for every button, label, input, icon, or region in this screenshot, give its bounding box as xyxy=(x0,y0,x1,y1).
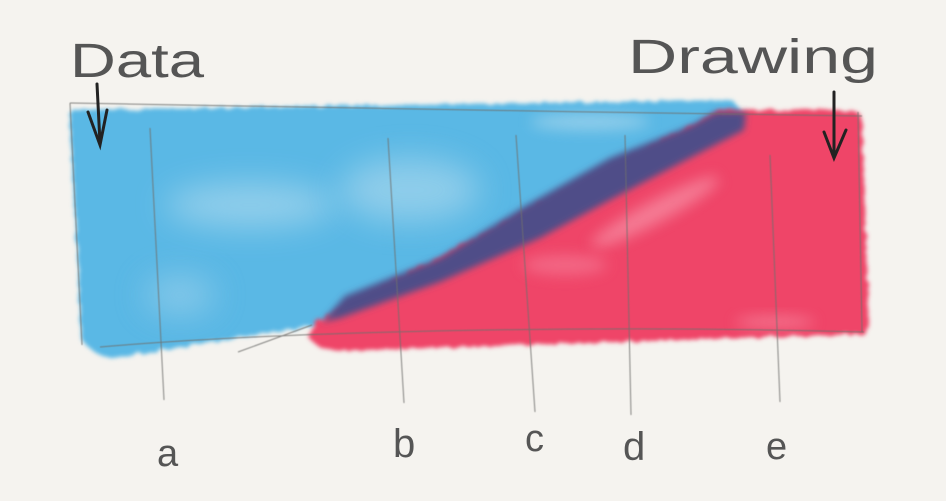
label c: c xyxy=(525,418,544,460)
label a: a xyxy=(157,433,179,475)
arrow: drawing xyxy=(824,92,846,158)
arrow: data xyxy=(88,84,107,145)
overlap band xyxy=(322,112,746,322)
heading: Data: Data xyxy=(70,35,204,88)
red drawing area xyxy=(308,110,869,351)
label b: b xyxy=(393,422,415,466)
chart frame and guide lines xyxy=(70,103,864,415)
label e: e xyxy=(766,426,787,468)
diagram: data and drawing watercolor sketch xyxy=(66,38,874,466)
label d: d xyxy=(623,425,645,469)
blue data area xyxy=(70,100,742,358)
heading: Drawing: Drawing xyxy=(628,31,878,84)
